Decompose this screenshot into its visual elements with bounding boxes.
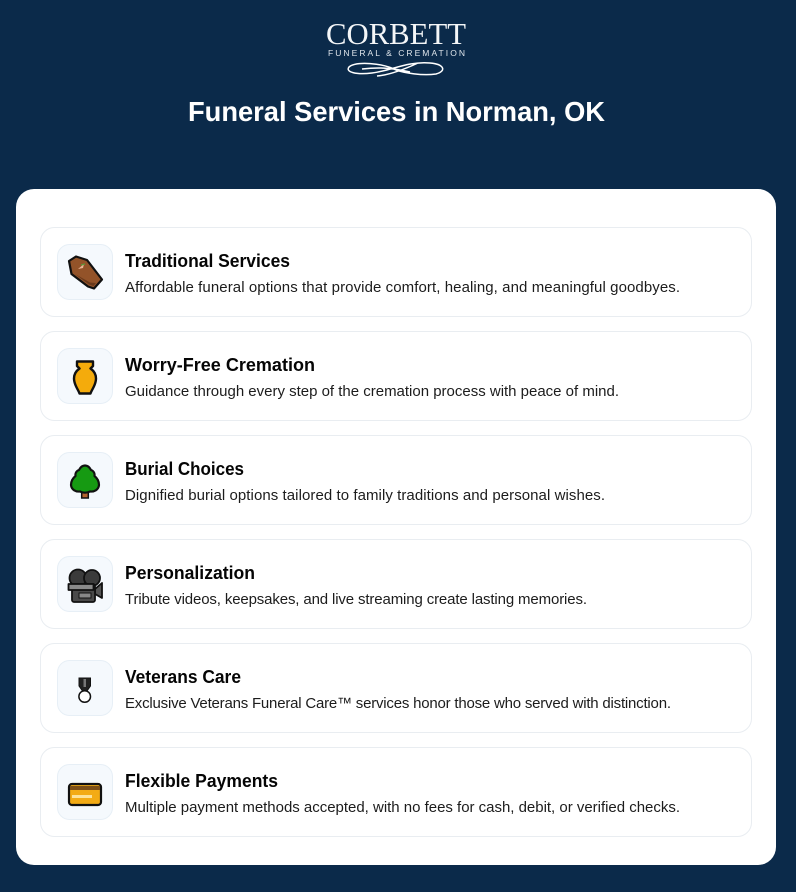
description: Multiple payment methods accepted, with no fees for cash, debit, or verified checks. [125,799,680,816]
description: Guidance through every step of the cremation process with peace of mind. [125,383,619,400]
card: Worry-Free Cremation [40,332,752,420]
icon: urn [74,362,96,394]
card: Traditional Services [40,228,752,316]
heading: Flexible Payments [125,771,278,791]
panel: services list [16,189,776,865]
card: Personalization [40,540,752,628]
icon: tree [71,466,99,498]
description: Tribute videos, keepsakes, and live streaming create lasting memories. [125,591,587,608]
description: Exclusive Veterans Funeral Care™ services honor those who served with distinction. [125,695,671,712]
icon: video camera [68,570,102,602]
logo: Corbett Funeral & Cremation: FUNERAL & CREMATION [328,48,465,58]
description: Affordable funeral options that provide comfort, healing, and meaningful goodbyes. [125,279,680,296]
title: Funeral Services in Norman, OK [188,96,605,127]
logo: Corbett Funeral & Cremation [326,16,466,76]
heading: Traditional Services [125,251,290,271]
heading: Worry-Free Cremation [125,355,315,375]
heading: Veterans Care [125,667,241,687]
card: Flexible Payments [40,748,752,836]
logo: Corbett Funeral & Cremation: CORBETT [326,16,466,51]
icon: coffin [69,256,102,288]
card: Veterans Care [40,644,752,732]
icon: medal [79,678,90,702]
icon: payment card [69,784,101,805]
heading: Personalization [125,563,255,583]
description: Dignified burial options tailored to family traditions and personal wishes. [125,487,605,504]
heading: Burial Choices [125,459,244,479]
card: Burial Choices [40,436,752,524]
